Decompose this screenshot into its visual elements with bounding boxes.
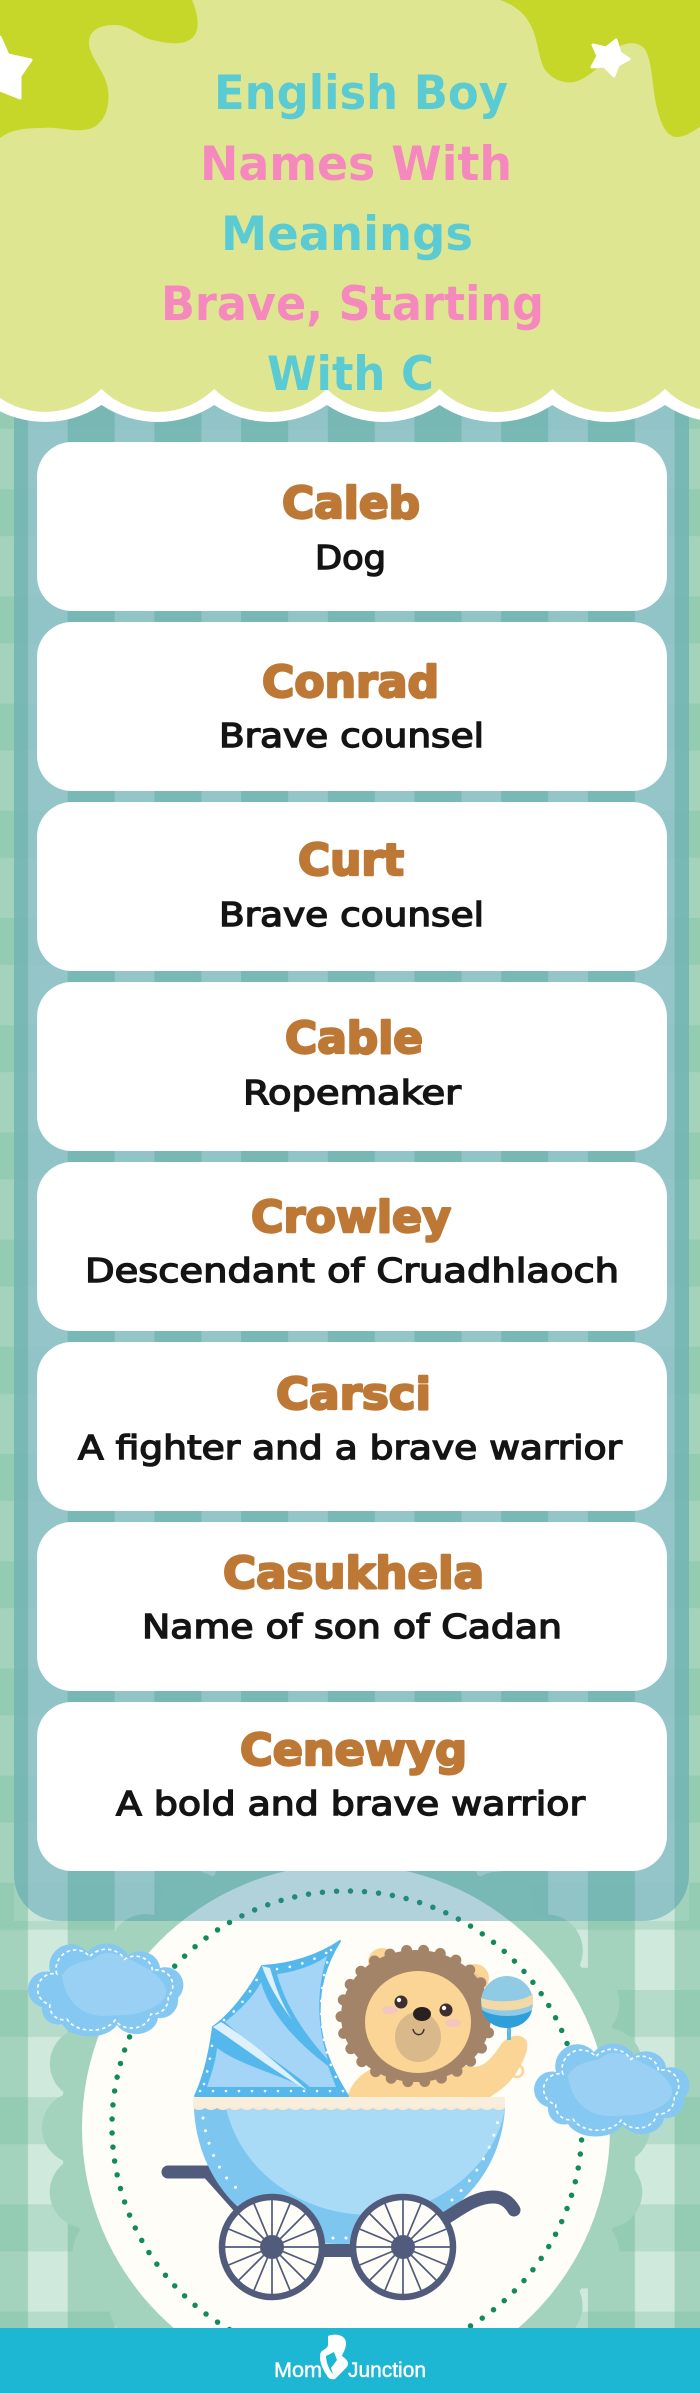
card: Crowley: Crowley [251,1192,451,1243]
title: Brave, Starting [161,277,544,332]
card: Cable: Cable [285,1013,423,1064]
card: Conrad [37,622,667,791]
stroller basket [193,2097,505,2244]
logo: MomJunction: Junction [348,2359,426,2382]
footer band [0,2328,700,2393]
card: Cable: Ropemaker [243,1073,462,1112]
star: left [0,37,31,98]
rattle [481,1976,533,2040]
card: Casukhela: Name of son of Cadan [142,1607,562,1646]
title: Names With [200,137,512,192]
wheel: right [353,2197,453,2297]
stroller canopy [195,1941,348,2096]
white circle with dotted ring [82,1871,610,2328]
stroller frame [168,2172,240,2208]
stroller handle and axle [320,2197,514,2257]
translucent teal panel [14,300,689,1921]
card: Cenewyg: A bold and brave warrior [116,1784,585,1823]
card: Crowley [37,1162,667,1331]
card: Carsci: A fighter and a brave warrior [78,1428,622,1467]
title [161,66,544,402]
title: Meanings [221,207,473,262]
title: English Boy [214,66,508,121]
wheel: left [222,2197,322,2297]
header [0,0,700,422]
logo: MomJunction: Mom [274,2359,322,2382]
card: Curt: Brave counsel [219,895,484,934]
lime blob: top right [500,0,700,137]
lime blob: top left [0,0,198,138]
lion [341,1948,527,2097]
icon: right cloud [534,2044,689,2137]
card: Conrad: Conrad [262,657,439,708]
star: right [592,40,629,76]
card: Cenewyg [37,1702,667,1871]
illustration: lion in baby stroller [168,1941,533,2297]
card: Caleb [37,442,667,611]
card: Carsci [37,1342,667,1511]
card: Conrad: Brave counsel [219,716,484,755]
card: Carsci: Carsci [276,1369,431,1420]
card: Caleb: Caleb [282,478,420,529]
icon: left cloud [28,1944,183,2037]
card: Curt: Curt [298,835,404,886]
card: Cenewyg: Cenewyg [240,1725,467,1776]
scalloped green blob behind circle [42,1871,650,2328]
card: Cable [37,982,667,1151]
card: Casukhela: Casukhela [223,1548,484,1599]
logo: MomJunction [274,2335,426,2382]
card: Curt [37,802,667,971]
card: Crowley: Descendant of Cruadhlaoch [85,1251,619,1290]
title: With C [267,347,434,402]
card: Caleb: Dog [315,538,386,577]
card: Casukhela [37,1522,667,1691]
